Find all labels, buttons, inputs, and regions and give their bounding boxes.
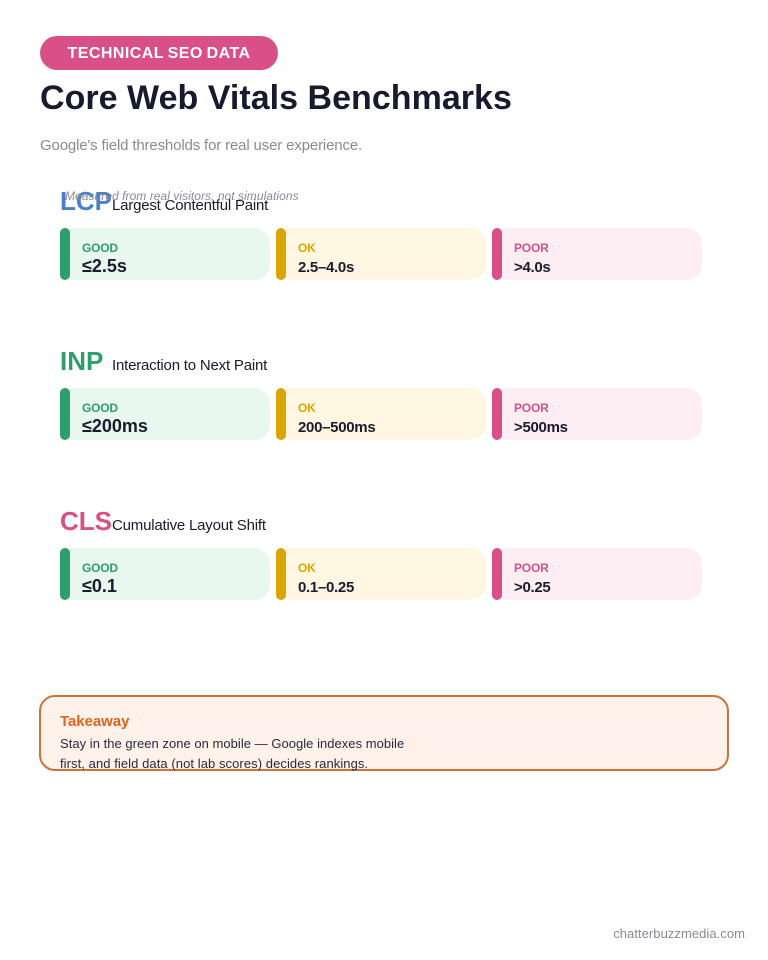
takeaway text: Stay in the green zone on mobile — Google indexes mobile: [60, 736, 404, 751]
takeaway text: first, and field data (not lab scores) decides rankings.: [60, 756, 368, 771]
INP poor threshold: POOR: [514, 401, 549, 415]
LCP code: LCP: [60, 186, 112, 216]
CLS poor threshold: POOR: [514, 561, 549, 575]
note: measured from real visitors: Measured from real visitors, not simulations: [65, 189, 299, 203]
CLS ok threshold: OK: [298, 561, 316, 575]
CLS ok threshold: 0.1–0.25: [298, 579, 354, 596]
CLS full name: Cumulative Layout Shift: [112, 517, 266, 534]
CLS good threshold: GOOD: [82, 561, 118, 575]
callout: takeaway: [39, 695, 729, 771]
LCP good threshold: [60, 228, 270, 280]
INP good threshold: GOOD: [82, 401, 118, 415]
INP poor threshold: >500ms: [514, 419, 568, 436]
INP full name: Interaction to Next Paint: [112, 357, 267, 374]
panel: CLS metric: [60, 506, 702, 600]
LCP poor threshold: [492, 228, 702, 280]
badge: technical SEO data: [40, 36, 278, 70]
INP good threshold: ≤200ms: [82, 416, 148, 436]
CLS good threshold: ≤0.1: [82, 576, 117, 596]
INP good threshold: [60, 388, 270, 440]
CLS code: CLS: [60, 506, 112, 536]
CLS poor threshold: >0.25: [514, 579, 550, 596]
CLS good threshold: [60, 548, 270, 600]
footer: source: chatterbuzzmedia.com: [613, 926, 745, 941]
badge: technical SEO data: TECHNICAL SEO DATA: [68, 45, 250, 62]
CLS poor threshold: [492, 548, 702, 600]
title: Core Web Vitals Benchmarks: [40, 79, 512, 117]
INP ok threshold: [276, 388, 486, 440]
panel: INP metric: [60, 346, 702, 440]
LCP good threshold: GOOD: [82, 241, 118, 255]
LCP poor threshold: >4.0s: [514, 259, 550, 276]
subtitle: Google's field thresholds for real user experience.: [40, 137, 362, 154]
CLS ok threshold: [276, 548, 486, 600]
LCP ok threshold: OK: [298, 241, 316, 255]
takeaway text: [60, 736, 404, 771]
INP ok threshold: OK: [298, 401, 316, 415]
LCP poor threshold: POOR: [514, 241, 549, 255]
panel: LCP metric: [60, 186, 702, 280]
INP ok threshold: 200–500ms: [298, 419, 375, 436]
takeaway heading: Takeaway: [60, 713, 129, 730]
LCP ok threshold: 2.5–4.0s: [298, 259, 354, 276]
LCP full name: Largest Contentful Paint: [112, 197, 268, 214]
LCP ok threshold: [276, 228, 486, 280]
INP code: INP: [60, 346, 103, 376]
LCP good threshold: ≤2.5s: [82, 256, 127, 276]
INP poor threshold: [492, 388, 702, 440]
